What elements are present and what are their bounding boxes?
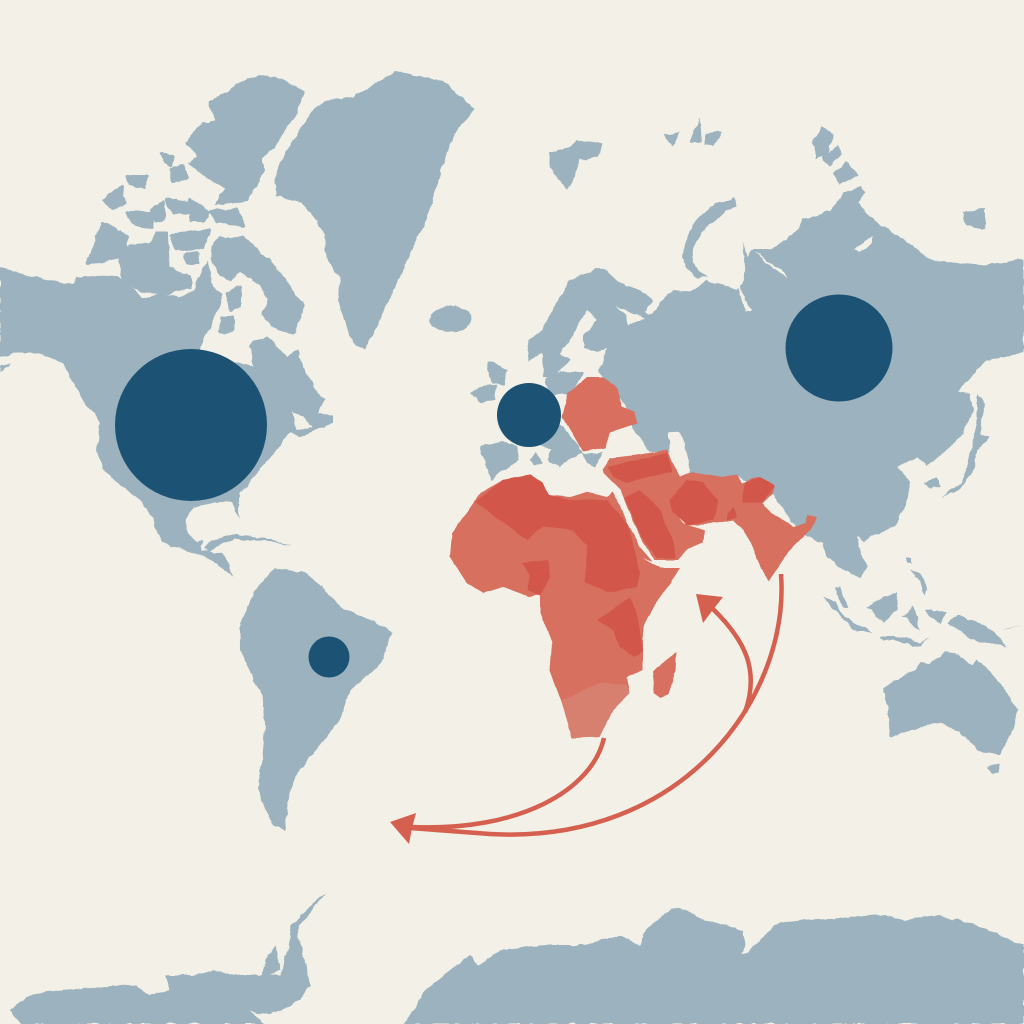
patch: Pakistan bbox=[727, 507, 737, 520]
land: Denmark and Baltic bbox=[545, 372, 585, 395]
land: Svalbard bbox=[548, 140, 602, 190]
bubble: Russia bbox=[786, 294, 892, 402]
patch: Iran bbox=[670, 480, 718, 525]
region: Africa bbox=[450, 475, 680, 738]
land: Japan bbox=[942, 393, 990, 498]
land: Alaska islands bbox=[0, 364, 12, 372]
land: Franz Josef Land bbox=[663, 118, 722, 147]
land: Novaya Zemlya bbox=[682, 198, 736, 278]
region: Middle East and South Asia bbox=[602, 450, 817, 582]
patch: Afghanistan bbox=[742, 477, 775, 503]
land: Borneo bbox=[867, 592, 898, 623]
land: Queen Elizabeth islands bbox=[104, 155, 243, 228]
land: Baffin Island bbox=[213, 237, 303, 333]
bubble: South America bbox=[308, 636, 350, 678]
red highlighted regions bbox=[450, 377, 817, 738]
region: Eastern Europe bbox=[562, 377, 637, 452]
land: New Guinea bbox=[925, 610, 1023, 647]
region: Southern Africa bbox=[562, 682, 630, 738]
land: Antarctic Peninsula bbox=[10, 892, 327, 1024]
land: Sumatra bbox=[823, 587, 873, 632]
arrow: South Asia to South Atlantic bbox=[410, 574, 782, 835]
land: Java bbox=[880, 637, 930, 647]
arrows bbox=[410, 574, 782, 835]
land: South America bbox=[240, 568, 392, 830]
patch: West Africa bbox=[522, 560, 550, 595]
land: Philippines bbox=[907, 557, 928, 595]
region: Madagascar bbox=[653, 652, 676, 698]
arrowhead: South Atlantic bbox=[390, 813, 416, 844]
patch: East Africa bbox=[597, 598, 643, 657]
land: Greenland bbox=[275, 71, 475, 350]
patch: North Africa bbox=[475, 475, 640, 592]
patch: Arabia bbox=[624, 490, 675, 558]
land: Tasmania bbox=[987, 763, 1000, 773]
water: inland seas and gulfs bbox=[293, 236, 872, 430]
land: Korea bbox=[923, 477, 940, 488]
land: Severnaya Zemlya bbox=[813, 128, 857, 182]
arrow: Africa to South Atlantic bbox=[410, 738, 604, 827]
bubble: North America bbox=[115, 349, 267, 501]
land: Cuba bbox=[203, 535, 293, 552]
patch: Levant bbox=[607, 453, 672, 483]
land: New Siberian Islands bbox=[962, 208, 985, 230]
land: Central Europe and Iberia bbox=[480, 420, 603, 480]
land: Australia bbox=[883, 652, 1017, 755]
arrow: curve to Indian Ocean bbox=[712, 608, 751, 712]
land: Iceland bbox=[430, 306, 472, 332]
land: Ellesmere and Devon bbox=[187, 77, 303, 203]
land: Sulawesi bbox=[902, 607, 920, 630]
bubble: Europe bbox=[497, 383, 561, 447]
land: British Isles bbox=[473, 363, 507, 402]
land: Antarctica bbox=[405, 908, 1024, 1024]
land: Eurasia with Scandinavia bbox=[528, 187, 1024, 578]
land: North America bbox=[0, 260, 333, 577]
land: Banks and Victoria islands bbox=[88, 223, 210, 292]
arrowhead: Indian Ocean bbox=[696, 594, 723, 623]
